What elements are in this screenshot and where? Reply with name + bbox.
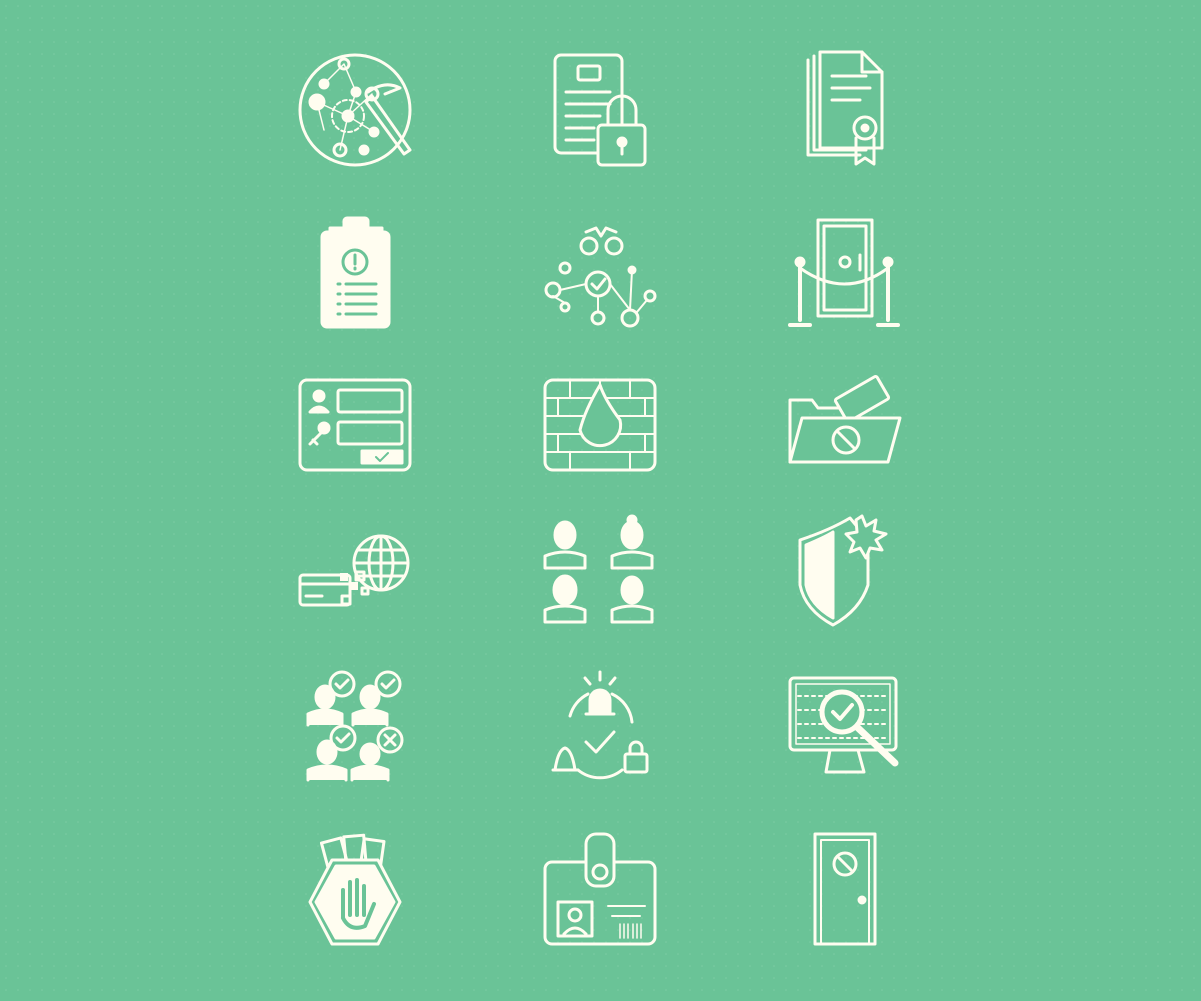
icon: firewall brick with flame: [545, 380, 655, 470]
icon: network globe with hammer: [300, 55, 410, 165]
icon: four people: [545, 516, 652, 622]
icon: people with checks and intruder: [308, 672, 402, 780]
icon: monitor with magnifier: [790, 678, 896, 772]
icon: ID badge: [545, 834, 655, 944]
icon: alarm cycle: [553, 672, 647, 778]
icon: stop hand hexagon with cards: [310, 835, 400, 944]
icon: binoculars with check network: [546, 228, 655, 326]
icon: folder with blocked card: [790, 376, 900, 462]
icon: vault door with rope barrier: [790, 220, 898, 325]
icon: shield with burst: [800, 516, 886, 625]
icon: door with no-entry sign: [815, 834, 875, 944]
icon: document with padlock: [555, 55, 645, 165]
icon: credit card to globe: [300, 536, 408, 605]
icon: documents with certificate ribbon: [808, 52, 882, 164]
icon: clipboard with alert: [322, 218, 389, 327]
icon: login form: [300, 380, 410, 470]
